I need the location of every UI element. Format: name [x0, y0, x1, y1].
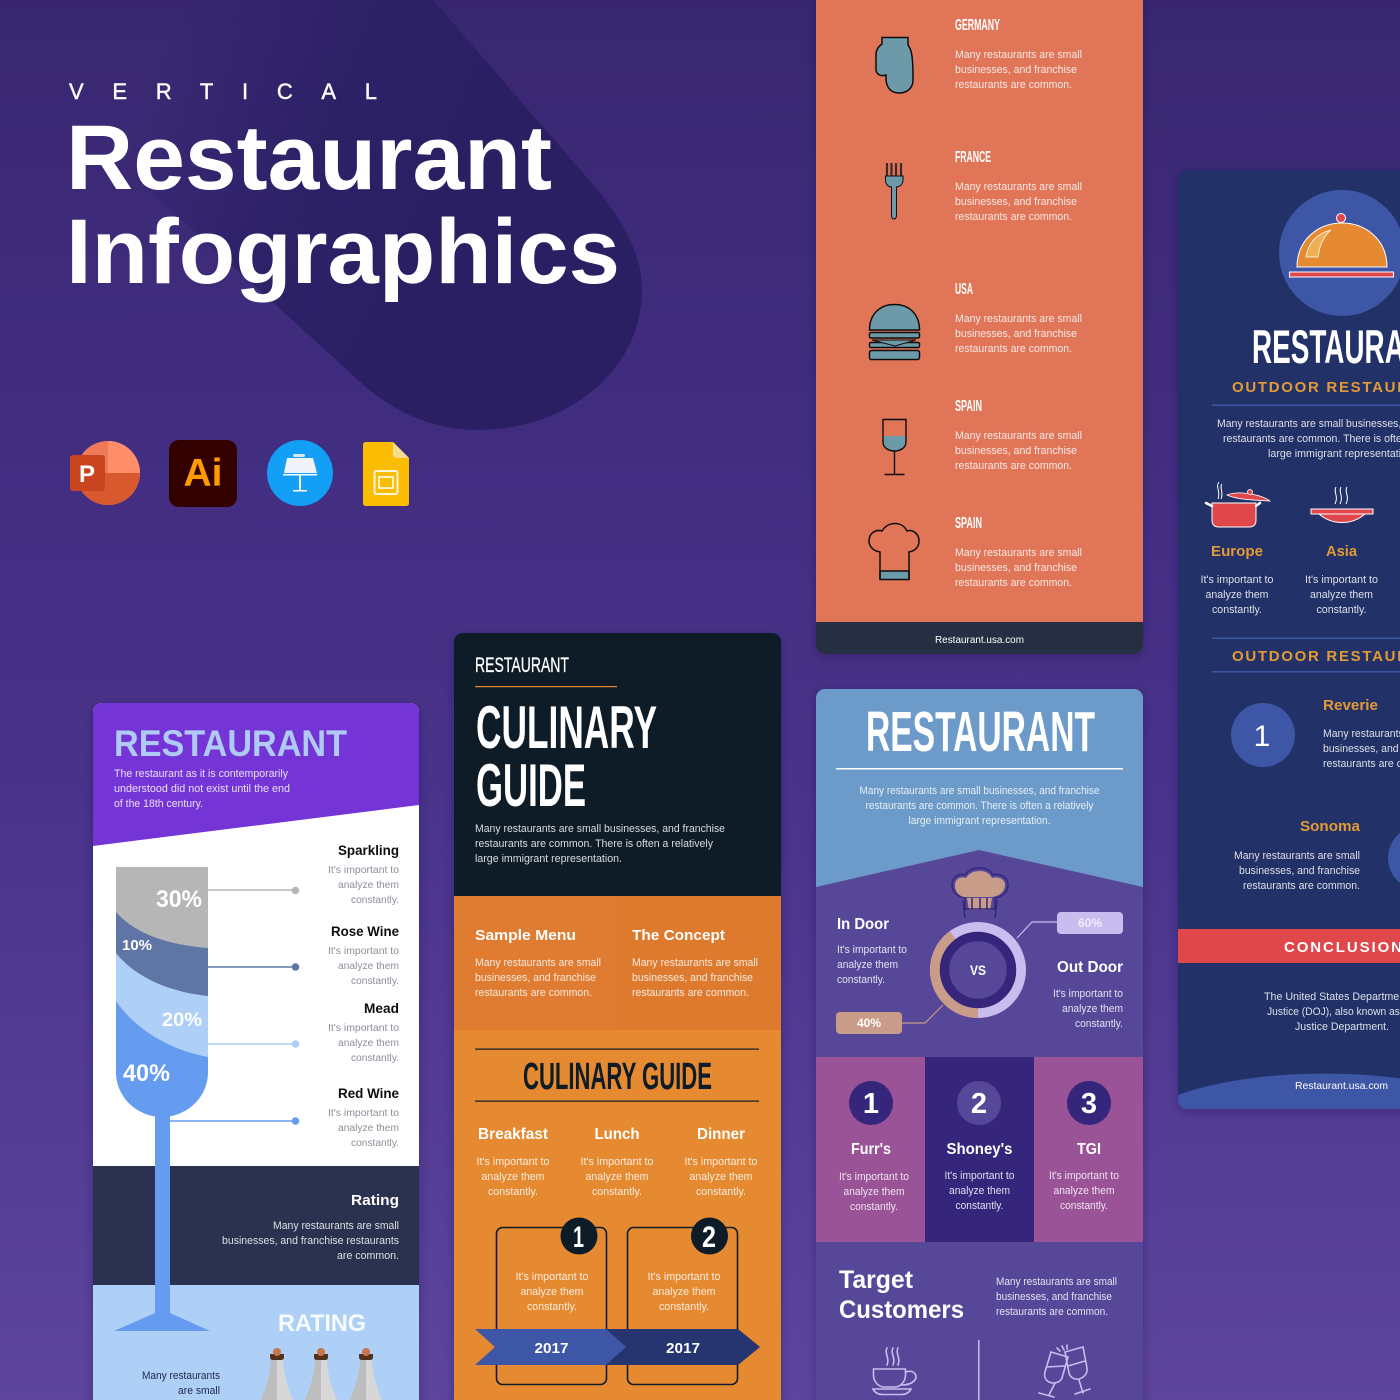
country headings: SPAIN [955, 398, 982, 415]
target customers heading [839, 1270, 964, 1318]
card intro text: Many restaurants are small businesses, and franchise [860, 785, 1100, 797]
wine labels: Sparkling [338, 842, 399, 858]
meals: It's important to [580, 1156, 654, 1168]
meals: Dinner [697, 1126, 745, 1143]
region descriptions: constantly. [1316, 604, 1366, 616]
timeline boxes: constantly. [659, 1301, 709, 1313]
card intro text [1217, 418, 1400, 460]
culinary header text: CULINARY [476, 694, 657, 761]
rating text [222, 1192, 399, 1262]
chart: donut: 40% [857, 1018, 881, 1030]
chart: wine glass: 10% [122, 937, 152, 954]
panel: culinary guide card [454, 633, 781, 1400]
chart: wine glass [114, 867, 299, 1331]
rating text: Many restaurants are small [273, 1220, 399, 1232]
wine labels: It's important to [328, 1107, 399, 1119]
conclusion text: Justice Department. [1295, 1021, 1389, 1033]
title block [66, 79, 620, 303]
ranked columns: analyze them [949, 1185, 1010, 1197]
card heading: RESTAURANT [866, 700, 1095, 764]
chart: wine glass: 40% [123, 1060, 170, 1087]
meals: constantly. [696, 1186, 746, 1198]
country descriptions: Many restaurants are small [955, 49, 1082, 61]
in door text [837, 916, 907, 986]
wine labels: analyze them [338, 1122, 399, 1134]
icon: Keynote [267, 440, 333, 506]
culinary intro text: restaurants are common. There is often a relatively [475, 838, 713, 850]
out door text: Out Door [1057, 959, 1123, 976]
reverie item: 1 [1254, 720, 1270, 753]
card heading: RESTAURANT [114, 723, 347, 764]
culinary header text: RESTAURANT [475, 654, 569, 677]
card intro text: restaurants are common. There is often a relatively [866, 800, 1094, 812]
icon: wok [1311, 487, 1373, 522]
chart: donut: 60% [1078, 918, 1102, 930]
rating band [93, 1166, 419, 1285]
country headings: USA [955, 281, 973, 298]
icon: coffee cup [873, 1348, 916, 1394]
rating note: Many restaurants [142, 1370, 220, 1382]
ranked columns: Shoney's [946, 1141, 1013, 1158]
region labels: Europe [1211, 543, 1263, 560]
target customers text: Many restaurants are small [996, 1276, 1117, 1288]
title block: Restaurant [66, 107, 552, 209]
timeline boxes: 1 [573, 1221, 584, 1254]
rating text: Rating [351, 1192, 399, 1209]
meals: Lunch [594, 1126, 640, 1143]
panel: wine restaurant card [93, 703, 419, 1400]
country headings: GERMANY [955, 17, 1000, 34]
panel: countries card [816, 0, 1143, 654]
country descriptions: businesses, and franchise [955, 196, 1077, 208]
meals: It's important to [476, 1156, 550, 1168]
region labels [1211, 543, 1358, 560]
title block: Infographics [66, 201, 620, 303]
header band [93, 703, 419, 846]
culinary intro text: large immigrant representation. [475, 853, 622, 865]
card intro text: of the 18th century. [114, 798, 203, 810]
wine labels: It's important to [328, 1022, 399, 1034]
country headings: SPAIN [955, 515, 982, 532]
country descriptions: Many restaurants are small [955, 430, 1082, 442]
wine labels: constantly. [351, 894, 399, 906]
reverie item: Reverie [1323, 697, 1378, 714]
meals [476, 1126, 758, 1198]
conclusion band: CONCLUSION [1284, 939, 1400, 956]
meals: constantly. [488, 1186, 538, 1198]
footer bar: Restaurant.usa.com [935, 634, 1024, 646]
card intro text: The restaurant as it is contemporarily [114, 768, 288, 780]
ranked columns: Furr's [851, 1141, 891, 1158]
timeline ribbon [475, 1329, 760, 1365]
card intro text [114, 768, 290, 810]
wine labels: analyze them [338, 1037, 399, 1049]
icon: bottles [261, 1348, 382, 1400]
country descriptions: restaurants are common. [955, 211, 1072, 223]
ranked columns: 3 [1081, 1088, 1097, 1120]
rating body [93, 1285, 419, 1400]
footer url: Restaurant.usa.com [1295, 1080, 1388, 1092]
footer bar [816, 622, 1143, 654]
icon: cloche [1279, 190, 1400, 316]
ranked columns: constantly. [956, 1200, 1004, 1212]
menu and concept panel: The Concept [632, 927, 725, 944]
panel: restaurant vs card [816, 689, 1143, 1400]
timeline ribbon: 2017 [666, 1340, 700, 1357]
country headings [955, 17, 1000, 532]
footer wave [1178, 1074, 1400, 1109]
region descriptions [1200, 574, 1378, 616]
timeline boxes: analyze them [520, 1286, 584, 1298]
meals: analyze them [586, 1171, 648, 1183]
icon: chef hat [952, 868, 1008, 918]
rating note [142, 1372, 220, 1394]
chart: wine glass: 30% [156, 886, 202, 913]
ranked columns [816, 1057, 1143, 1242]
timeline boxes [496, 1218, 738, 1384]
panel: outdoor restaurant card [1178, 170, 1400, 1109]
rating text: businesses, and franchise restaurants [222, 1235, 399, 1247]
country descriptions: businesses, and franchise [955, 64, 1077, 76]
country descriptions: restaurants are common. [955, 460, 1072, 472]
sonoma item: restaurants are common. [1243, 880, 1360, 892]
country headings: FRANCE [955, 149, 991, 166]
meals: It's important to [684, 1156, 758, 1168]
sonoma item: businesses, and franchise [1239, 865, 1360, 877]
wine labels: constantly. [351, 975, 399, 987]
out door text [1053, 959, 1123, 1030]
menu and concept panel: restaurants are common. [475, 987, 592, 999]
ranked columns: 1 [863, 1088, 879, 1120]
country descriptions: restaurants are common. [955, 79, 1072, 91]
country descriptions: restaurants are common. [955, 577, 1072, 589]
ranked columns: analyze them [844, 1186, 904, 1198]
icon: burger [870, 304, 920, 360]
culinary header text: GUIDE [476, 752, 586, 819]
card intro text: large immigrant representation. [908, 815, 1050, 827]
culinary header text [476, 657, 656, 806]
wine labels: constantly. [351, 1137, 399, 1149]
menu and concept panel: businesses, and franchise [475, 972, 596, 984]
out door text: analyze them [1062, 1003, 1123, 1015]
region descriptions: It's important to [1305, 574, 1378, 586]
region labels: Asia [1326, 543, 1358, 560]
country descriptions: businesses, and franchise [955, 562, 1077, 574]
wine labels: constantly. [351, 1052, 399, 1064]
region descriptions: analyze them [1206, 589, 1268, 601]
rating heading: RATING [278, 1310, 366, 1337]
wine labels [328, 842, 399, 1149]
icon: PowerPoint: P [79, 461, 95, 488]
target customers text: businesses, and franchise [996, 1291, 1112, 1303]
ranked columns: It's important to [839, 1171, 909, 1183]
in door text: In Door [837, 916, 889, 933]
culinary lower section [454, 1030, 781, 1400]
region descriptions: It's important to [1200, 574, 1274, 586]
rating note: are small [178, 1385, 220, 1397]
timeline boxes: analyze them [652, 1286, 716, 1298]
menu and concept panel: businesses, and franchise [632, 972, 753, 984]
culinary guide heading: CULINARY GUIDE [523, 1056, 712, 1098]
icon: chef hat [869, 524, 919, 580]
meals: analyze them [482, 1171, 544, 1183]
culinary intro text: Many restaurants are small businesses, and franchise [475, 823, 725, 835]
wine labels: analyze them [338, 960, 399, 972]
menu and concept panel: Many restaurants are small [632, 957, 758, 969]
timeline boxes: It's important to [516, 1271, 588, 1283]
icon: Illustrator: Ai [184, 452, 222, 495]
meals: Breakfast [478, 1126, 549, 1143]
timeline boxes: constantly. [527, 1301, 577, 1313]
icon: Google Slides [363, 442, 409, 506]
country descriptions: restaurants are common. [955, 343, 1072, 355]
target customers text: restaurants are common. [996, 1306, 1108, 1318]
country descriptions: businesses, and franchise [955, 328, 1077, 340]
purple body [816, 850, 1143, 1400]
in door text: constantly. [837, 974, 885, 986]
icon: wine glass [883, 420, 906, 474]
icon: fork [886, 163, 903, 219]
ranked columns: analyze them [1054, 1185, 1114, 1197]
out door text: constantly. [1075, 1018, 1123, 1030]
country descriptions: businesses, and franchise [955, 445, 1077, 457]
icon: toasting glasses [1039, 1345, 1090, 1397]
icon: Illustrator [169, 440, 237, 507]
timeline boxes: It's important to [648, 1271, 720, 1283]
wine labels: Mead [364, 1000, 399, 1016]
wine labels: It's important to [328, 864, 399, 876]
ranked columns: TGI [1077, 1141, 1101, 1158]
ranked columns: 2 [971, 1088, 987, 1120]
timeline boxes: 2 [702, 1221, 716, 1254]
menu and concept panel: Many restaurants are small [475, 957, 601, 969]
decorative dark rounded blob [0, 0, 642, 430]
chart: donut: VS [970, 962, 986, 978]
region descriptions: constantly. [1212, 604, 1262, 616]
ranked columns: constantly. [850, 1201, 898, 1213]
target customers heading: Customers [839, 1296, 964, 1324]
chart: donut [836, 912, 1123, 1034]
sonoma item: Sonoma [1300, 818, 1361, 835]
icon: pot [1206, 482, 1270, 527]
country descriptions [955, 49, 1082, 589]
in door text: analyze them [837, 959, 898, 971]
country descriptions: Many restaurants are small [955, 547, 1082, 559]
card intro text: understood did not exist until the end [114, 783, 290, 795]
sonoma item: Many restaurants are small [1234, 850, 1360, 862]
menu and concept panel: Sample Menu [475, 927, 576, 944]
wine labels: It's important to [328, 945, 399, 957]
in door text: It's important to [837, 944, 907, 956]
country descriptions: Many restaurants are small [955, 181, 1082, 193]
sonoma item [1234, 818, 1400, 892]
out door text: It's important to [1053, 988, 1123, 1000]
rating text: are common. [337, 1250, 399, 1262]
timeline ribbon: 2017 [534, 1340, 568, 1357]
wine labels: Red Wine [338, 1085, 399, 1101]
reverie item [1231, 697, 1400, 770]
wine labels: Rose Wine [331, 923, 399, 939]
target customers text [996, 1276, 1117, 1318]
card intro text [860, 785, 1100, 827]
menu and concept panel [454, 896, 781, 1030]
title block: VERTICAL [69, 79, 377, 104]
icon: PowerPoint [70, 441, 140, 505]
target customers heading: Target [839, 1266, 914, 1294]
conclusion band [1178, 929, 1400, 963]
chart: wine glass: 20% [162, 1010, 202, 1031]
conclusion text [1264, 991, 1400, 1033]
ranked columns: It's important to [944, 1170, 1014, 1182]
ranked columns: constantly. [1060, 1200, 1108, 1212]
meals: analyze them [690, 1171, 752, 1183]
icon: oven mitt [876, 38, 913, 93]
wine labels: analyze them [338, 879, 399, 891]
region descriptions: analyze them [1310, 589, 1373, 601]
meals: constantly. [592, 1186, 642, 1198]
ranked columns: It's important to [1049, 1170, 1119, 1182]
menu and concept panel: restaurants are common. [632, 987, 749, 999]
culinary intro text [475, 823, 725, 865]
country descriptions: Many restaurants are small [955, 313, 1082, 325]
